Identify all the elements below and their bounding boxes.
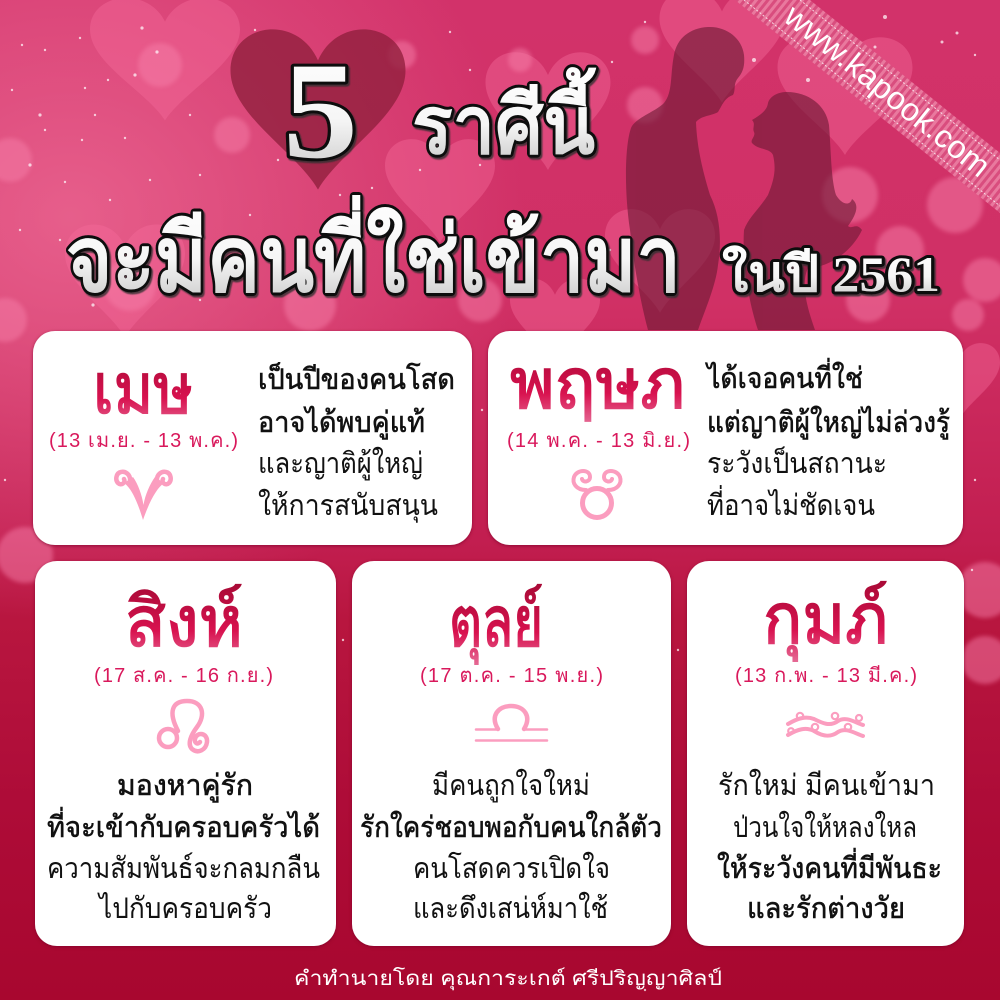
dates: (13 ก.พ. - 13 มี.ค.) xyxy=(735,665,917,687)
description: คนโสดควรเปิดใจ xyxy=(413,851,610,885)
panel: พฤษภ xyxy=(488,331,963,545)
panel: สิงห์ xyxy=(35,561,336,946)
description: ให้การสนับสนุน xyxy=(258,488,438,523)
dates: (14 พ.ค. - 13 มิ.ย.) xyxy=(507,430,690,452)
description: ความสัมพันธ์จะกลมกลืน xyxy=(47,852,320,885)
icon: taurus xyxy=(574,471,620,518)
icon: aries xyxy=(116,472,171,520)
big heart behind 5 xyxy=(230,29,406,190)
description: ที่จะเข้ากับครอบครัวได้ xyxy=(47,807,320,844)
icon: libra xyxy=(476,706,547,740)
title xyxy=(66,34,940,311)
couple silhouette xyxy=(626,27,862,330)
name: ตุลย์ xyxy=(449,584,543,665)
man silhouette xyxy=(626,27,744,330)
description: ได้เจอคนที่ใช่ xyxy=(705,358,863,395)
dates: (13 เม.ย. - 13 พ.ค.) xyxy=(49,430,238,452)
panel: ตุลย์ xyxy=(352,561,671,946)
description: เป็นปีของคนโสด xyxy=(258,361,455,396)
description: ป่วนใจให้หลงใหล xyxy=(733,810,917,844)
description: มีคนถูกใจใหม่ xyxy=(432,768,590,803)
woman silhouette xyxy=(744,92,862,330)
name: สิงห์ xyxy=(125,584,243,662)
name: เมษ xyxy=(93,352,193,429)
description xyxy=(717,768,942,925)
title: ราศีนี้ xyxy=(412,67,597,171)
panel: เมษ xyxy=(33,331,472,545)
description: และญาติผู้ใหญ่ xyxy=(258,446,423,481)
description: ที่อาจไม่ชัดเจน xyxy=(707,485,875,522)
description xyxy=(47,770,320,925)
description xyxy=(360,768,662,925)
description: และรักต่างวัย xyxy=(747,893,905,925)
description: ไปกับครอบครัว xyxy=(97,891,272,925)
footer credit: คำทำนายโดย คุณการะเกต์ ศรีปริญญาศิลป์ xyxy=(294,967,722,991)
description: มองหาคู่รัก xyxy=(117,770,253,803)
description xyxy=(705,358,950,522)
title: ในปี 2561 xyxy=(722,245,940,302)
description: ระวังเป็นสถานะ xyxy=(707,445,887,480)
description: รักใคร่ชอบพอกับคนใกล้ตัว xyxy=(360,810,662,844)
description: ให้ระวังคนที่มีพันธะ xyxy=(717,848,942,885)
description xyxy=(258,361,455,523)
panel: กุมภ์ xyxy=(687,561,964,946)
description: อาจได้พบคู่แท้ xyxy=(258,405,425,440)
description: และดึงเสน่ห์มาใช้ xyxy=(413,891,608,925)
dates: (17 ส.ค. - 16 ก.ย.) xyxy=(94,665,273,687)
ribbon: www.kapook.com xyxy=(735,0,1000,213)
dates: (17 ต.ค. - 15 พ.ย.) xyxy=(420,665,603,687)
description: รักใหม่ มีคนเข้ามา xyxy=(718,768,935,802)
icon: aquarius xyxy=(788,713,863,736)
name: กุมภ์ xyxy=(763,581,888,662)
title: 5 xyxy=(283,34,358,187)
description: แต่ญาติผู้ใหญ่ไม่ล่วงรู้ xyxy=(707,405,950,440)
title: จะมีคนที่ใช่เข้ามา xyxy=(66,194,681,311)
name: พฤษภ xyxy=(510,347,685,424)
icon: leo xyxy=(159,701,207,751)
ribbon: www.kapook.com: www.kapook.com xyxy=(777,0,997,184)
